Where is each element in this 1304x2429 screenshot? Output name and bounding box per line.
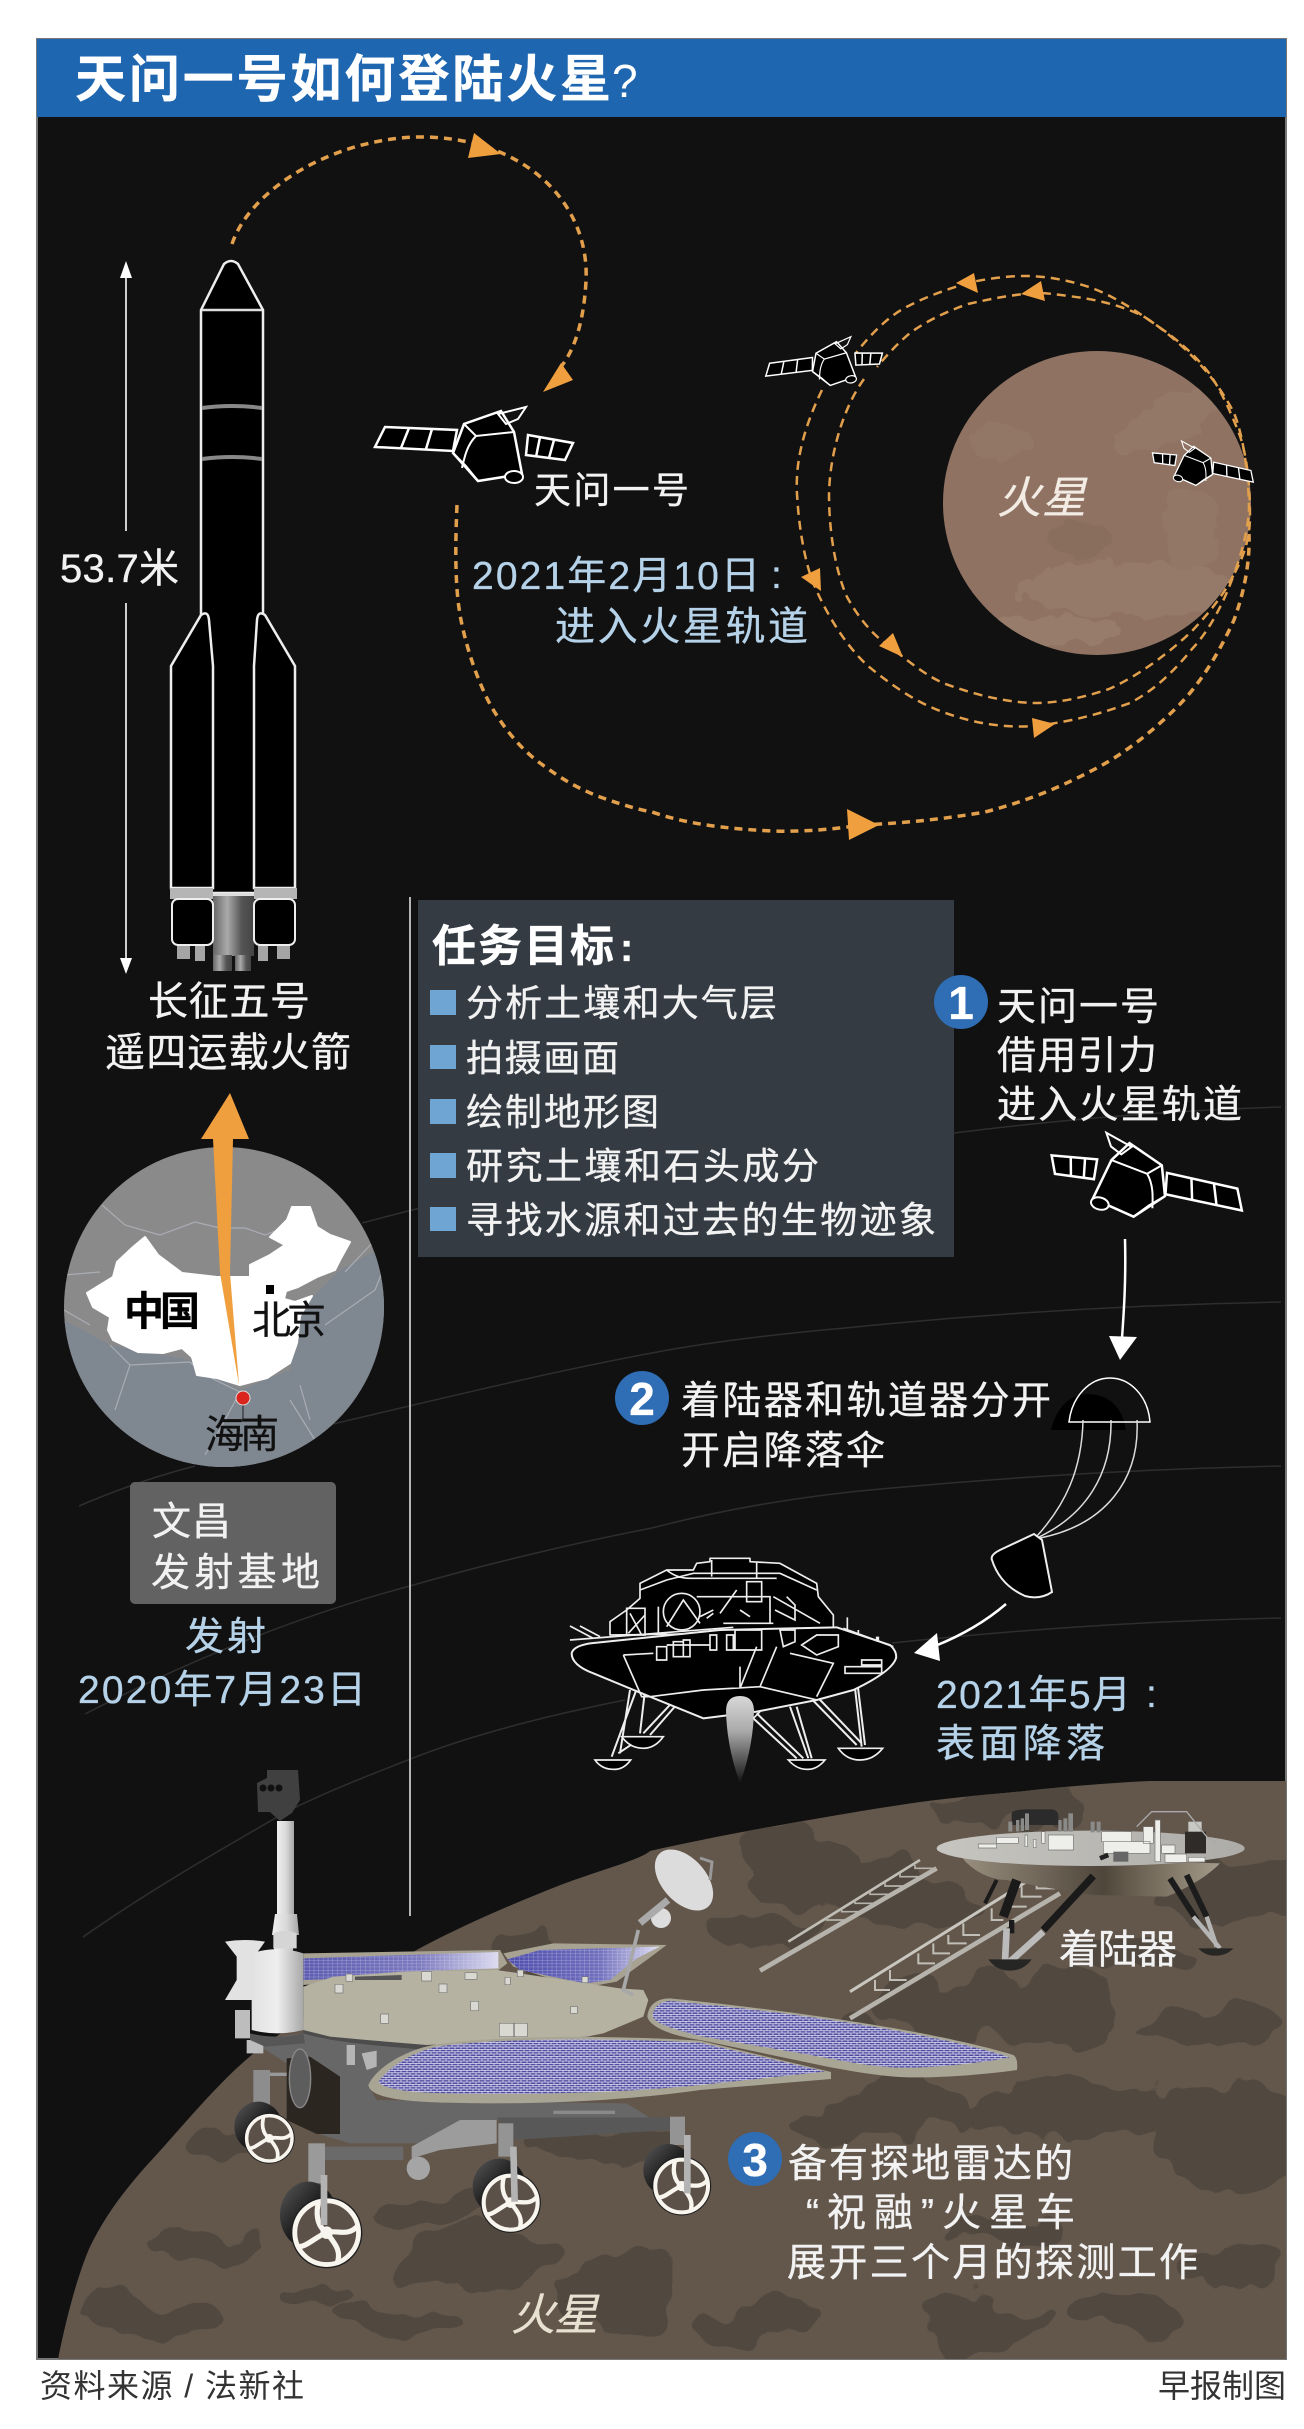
rocket name label [105, 980, 351, 1075]
arrow [543, 363, 573, 392]
badge 2: 2 [629, 1373, 655, 1425]
China silhouette [87, 1207, 350, 1385]
background orbit hairlines [79, 1107, 1281, 1937]
suspension [253, 2070, 685, 2183]
arrow [1032, 718, 1055, 738]
Beijing marker [266, 1285, 274, 1294]
step 1 text: 天问一号 [997, 986, 1159, 1029]
icon: orbiter before separation [1041, 1121, 1252, 1245]
step 1 text: 借用引力 [997, 1035, 1157, 1078]
step 2 text [681, 1380, 1051, 1473]
step 2 [615, 1371, 1051, 1473]
arrow [847, 809, 879, 840]
mast cylinder and instruments [225, 1931, 305, 2053]
second solar panel [647, 1998, 1017, 2077]
rocket height label: 53.7米 [60, 547, 179, 591]
arrow [956, 273, 978, 293]
landing date: : [1146, 1673, 1157, 1716]
objective 4: 研究土壤和石头成分 [466, 1146, 819, 1187]
badge 1: 1 [948, 977, 974, 1029]
height dimension arrow [120, 261, 132, 974]
Mars label: 火星 [997, 474, 1088, 523]
plume [726, 1696, 754, 1783]
Mars globe [943, 351, 1251, 655]
Mars orbit date label: 进入火星轨道 [555, 605, 808, 649]
arrow [879, 633, 903, 657]
rover body [250, 2033, 653, 2143]
step 3 text: “祝融”火星车 [806, 2192, 1075, 2235]
launch site box: 文昌 [152, 1501, 231, 1544]
detail lines [570, 1560, 893, 1718]
step 2 text: 着陆器和轨道器分开 [681, 1380, 1051, 1423]
antenna [623, 1930, 638, 1995]
dome [610, 1558, 833, 1635]
launch arrow [201, 1093, 249, 1385]
objective 3: 绘制地形图 [466, 1092, 659, 1133]
deck [937, 1831, 1245, 1866]
wheel struts [324, 2135, 687, 2225]
launch date [78, 1616, 366, 1712]
legs [612, 1655, 865, 1758]
step 1 text [997, 986, 1242, 1127]
deck fixtures [335, 1970, 588, 2037]
front solar panel [368, 2037, 831, 2103]
title question mark: ? [612, 55, 638, 107]
objective 1: 分析土壤和大气层 [466, 983, 777, 1024]
solar cells [653, 2001, 1010, 2068]
icon: orbiter at Mars orbit entry [762, 332, 887, 397]
label Beijing: 北京 [252, 1300, 326, 1343]
saucer [572, 1627, 896, 1718]
antenna dish [640, 1839, 724, 1928]
rocket core [201, 261, 263, 893]
Mars orbit date label: 2021年2月10日 [472, 555, 760, 598]
rocket boosters [171, 613, 213, 888]
launch date: 2020年7月23日 [78, 1669, 366, 1712]
step 3 text: 展开三个月的探测工作 [787, 2242, 1198, 2285]
rover Zhurong [225, 1770, 1017, 2268]
arrow [468, 133, 501, 158]
landing date [936, 1673, 1157, 1766]
rear solar panels [303, 1950, 507, 1985]
step 3 text: 备有探地雷达的 [788, 2143, 1073, 2186]
underbody [960, 1855, 1220, 1897]
Mars orbit date label: : [771, 554, 782, 597]
mast [257, 1770, 300, 1951]
wheels [234, 2102, 295, 2164]
ramps [760, 1860, 1060, 2018]
rocket name label: 遥四运载火箭 [105, 1031, 351, 1075]
launch site box [130, 1482, 336, 1604]
title: 天问一号如何登陆火星 [75, 51, 611, 108]
step 3 [728, 2132, 1198, 2285]
title bar [37, 39, 1286, 117]
badge 2 [615, 1371, 669, 1425]
deck [303, 1970, 648, 2045]
launch site box: 发射基地 [151, 1552, 320, 1595]
equipment [978, 1809, 1217, 1862]
source credit: 资料来源 / 法新社 [40, 2368, 304, 2404]
step 1 [934, 975, 1242, 1127]
step 3 text [787, 2143, 1198, 2285]
graphic credit: 早报制图 [1158, 2368, 1286, 2404]
wheel [643, 2144, 711, 2216]
Mars orbits [456, 273, 1250, 840]
lander on surface [760, 1809, 1245, 2018]
label China: 中国 [124, 1290, 200, 1334]
arrow [1021, 281, 1045, 301]
icon: lander descending [570, 1558, 896, 1783]
step 2 text: 开启降落伞 [681, 1430, 885, 1473]
rocket name label: 长征五号 [148, 980, 310, 1024]
arrow: orbiter to parachute [1109, 1239, 1137, 1360]
heading: 任务目标 [432, 922, 614, 971]
rocket engines [170, 888, 297, 971]
launch date: 发射 [185, 1616, 266, 1659]
icon: Tianwen-1 cruising [375, 407, 573, 483]
map: China globe [64, 1093, 395, 1480]
Wenchang marker [236, 1391, 250, 1419]
solar cells [378, 2039, 825, 2094]
rocket [170, 261, 297, 971]
bottom Mars label: 火星 [511, 2291, 600, 2340]
transfer trajectory to Mars [232, 133, 586, 392]
foot pads [595, 1737, 883, 1769]
badge 1 [934, 975, 988, 1029]
icon: orbiter over Mars [1147, 434, 1259, 501]
legs [985, 1880, 997, 1903]
label: Tianwen-1: 天问一号 [534, 470, 689, 511]
arrow [801, 568, 821, 591]
objective 2: 拍摄画面 [466, 1038, 619, 1079]
icon: parachute and capsule [992, 1378, 1150, 1597]
label lander: 着陆器 [1059, 1928, 1177, 1972]
objective 5: 寻找水源和过去的生物迹象 [466, 1200, 936, 1241]
badge 3 [728, 2132, 782, 2186]
step 1 text: 进入火星轨道 [997, 1084, 1242, 1127]
panel: mission objectives [418, 900, 954, 1257]
label Hainan: 海南 [205, 1414, 279, 1457]
wheel [473, 2159, 541, 2233]
landing date: 2021年5月 [936, 1674, 1131, 1717]
heading: : [620, 926, 633, 970]
wheel [280, 2182, 362, 2268]
Mars orbit date label [472, 554, 808, 649]
Mars surface [37, 1770, 1304, 2360]
vertical divider [409, 897, 411, 1916]
landing date: 表面降落 [936, 1723, 1105, 1766]
arrow: capsule to lander [914, 1604, 1006, 1661]
badge 3: 3 [742, 2134, 768, 2186]
